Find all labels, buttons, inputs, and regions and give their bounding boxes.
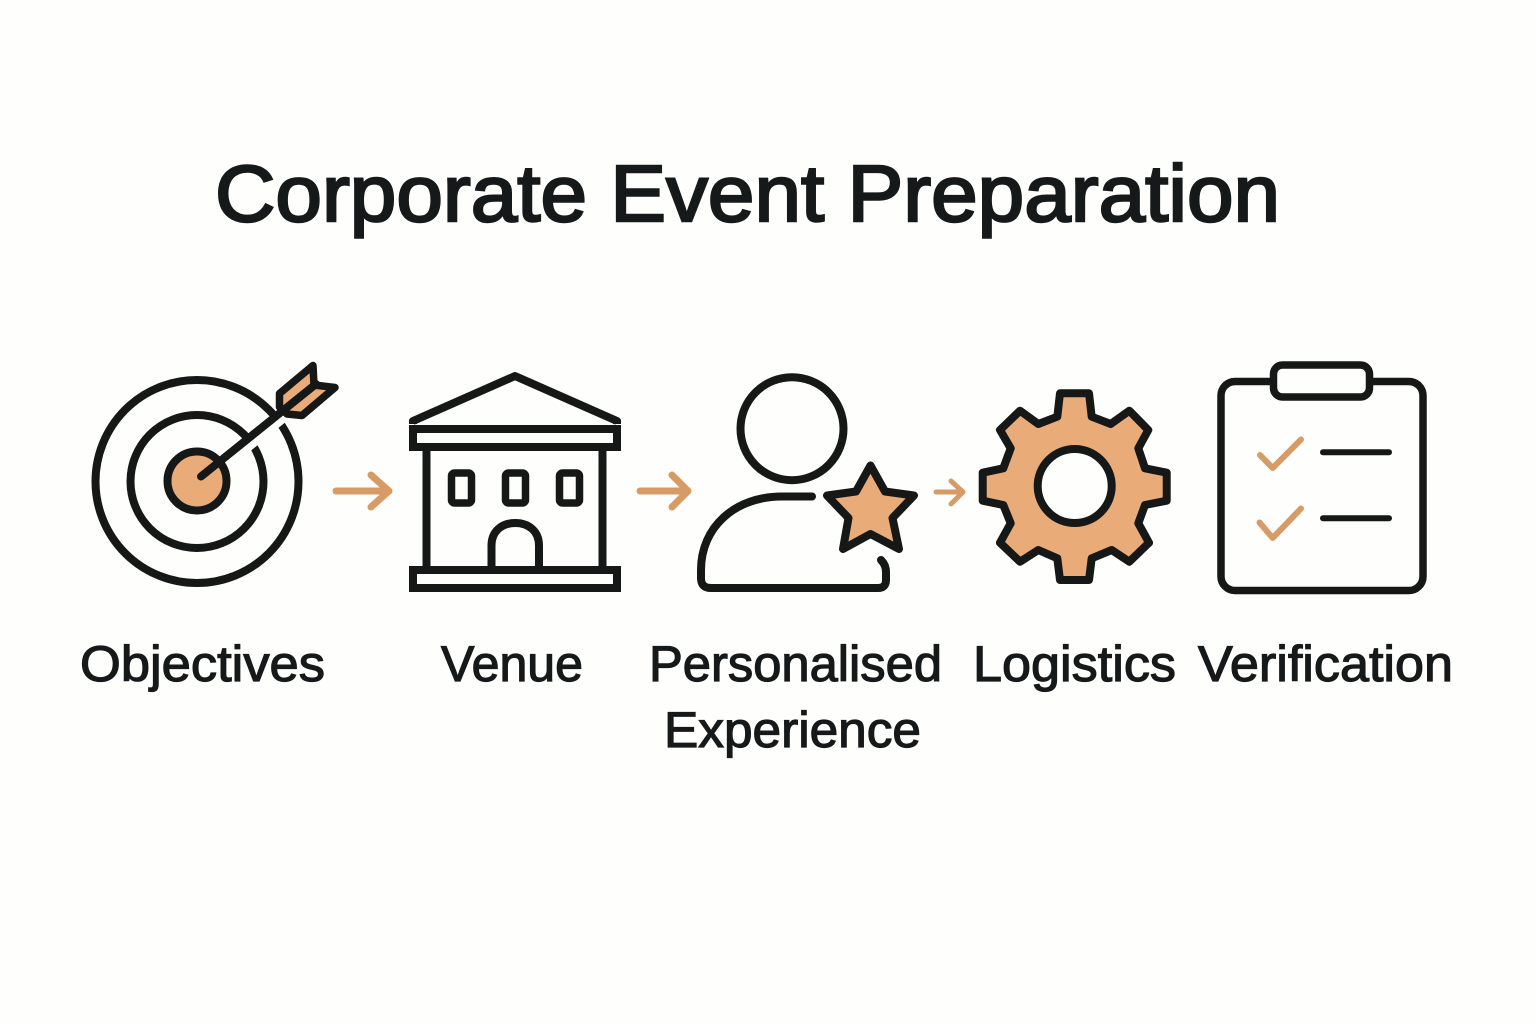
icon: person with star — [701, 377, 914, 588]
label: objectives: Objectives — [80, 636, 325, 692]
icon: target with arrow — [96, 366, 335, 583]
label: logistics: Logistics — [973, 636, 1176, 692]
title: Corporate Event Preparation — [215, 149, 1280, 238]
label: personalised experience — [649, 636, 942, 758]
label: personalised experience: Experience — [664, 702, 921, 758]
label: venue: Venue — [441, 636, 583, 692]
icon: gear — [983, 393, 1167, 580]
step 1: objectives — [80, 366, 335, 692]
step 3: personalised experience — [649, 377, 942, 758]
step 4: logistics — [973, 393, 1176, 692]
arrow: personalised experience to logistics — [936, 481, 963, 504]
step 2: venue — [413, 376, 617, 692]
arrow: objectives to venue — [336, 475, 389, 507]
step 5: verification — [1198, 365, 1453, 692]
icon: clipboard checklist — [1221, 365, 1423, 590]
label: personalised experience: Personalised — [649, 636, 942, 692]
arrow: venue to personalised experience — [640, 475, 688, 507]
icon: venue building — [413, 376, 617, 588]
label: verification: Verification — [1198, 636, 1453, 692]
